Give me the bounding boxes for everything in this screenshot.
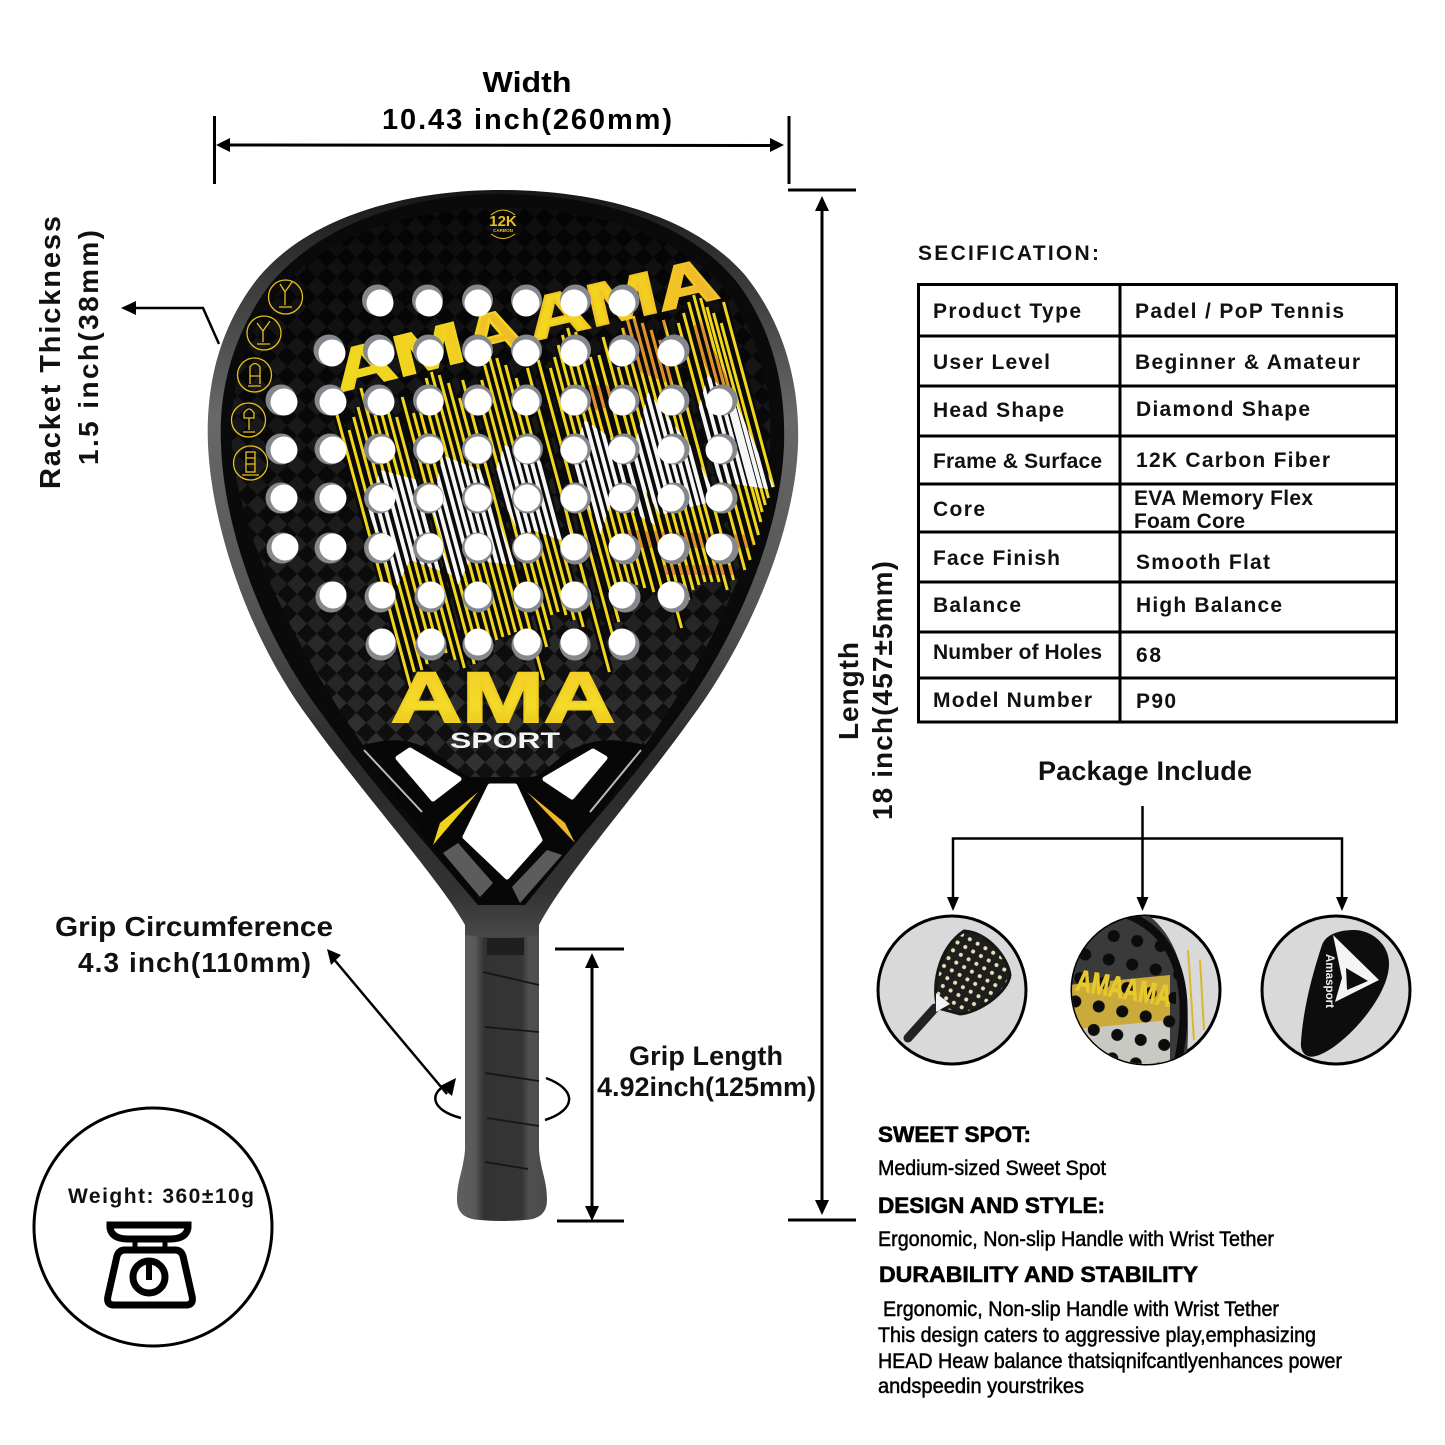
row: core: EVA Memory Flex [1134, 487, 1313, 510]
package item: racket [878, 916, 1026, 1064]
grip length label: Grip Length [629, 1041, 783, 1071]
length dimension [788, 190, 898, 1220]
length label: Length [833, 642, 864, 740]
grip circumference callout [55, 911, 569, 1120]
12K carbon badge [489, 210, 517, 238]
width arrow [214, 116, 789, 184]
row: face finish: Face Finish [933, 547, 1060, 570]
thickness arrow [121, 301, 219, 344]
design heading: DESIGN AND STYLE: [878, 1193, 1105, 1218]
bag body [1301, 930, 1389, 1057]
row: product type [933, 300, 1344, 323]
row: number of holes [933, 641, 1161, 667]
row: product type: Product Type [933, 300, 1081, 323]
row: product type: Padel / PoP Tennis [1135, 300, 1344, 323]
grip length value: 4.92inch(125mm) [597, 1072, 816, 1102]
grip length arrow [555, 949, 624, 1221]
SPORT logo: SPORT [450, 728, 561, 753]
package item: closeup [1070, 914, 1222, 1066]
specification table [918, 284, 1397, 722]
row: frame and surface: 12K Carbon Fiber [1136, 449, 1330, 472]
width value: 10.43 inch(260mm) [382, 104, 672, 136]
durability text: Ergonomic, Non-slip Handle with Wrist Tether [883, 1298, 1279, 1321]
row: balance: Balance [933, 594, 1021, 617]
12K carbon badge: 12K [489, 213, 517, 230]
sweet spot heading: SWEET SPOT: [878, 1122, 1031, 1147]
row: balance: High Balance [1136, 594, 1282, 617]
row: head shape: Head Shape [933, 399, 1064, 422]
durability text [878, 1298, 1342, 1398]
thickness value: 1.5 inch(38mm) [73, 230, 104, 465]
row: model number: P90 [1136, 690, 1176, 713]
grip handle [457, 935, 547, 1221]
row: number of holes: 68 [1136, 644, 1161, 667]
width label: Width [482, 67, 572, 99]
length arrow [788, 190, 856, 1220]
throat [362, 740, 645, 905]
face shading [232, 208, 770, 777]
racket frame [208, 190, 798, 945]
row: balance [933, 594, 1282, 617]
grip circumference value: 4.3 inch(110mm) [78, 947, 311, 978]
durability text: HEAD Heaw balance thatsiqnifcantlyenhances power [878, 1350, 1342, 1373]
12K carbon badge: CARBON [493, 228, 513, 233]
design text: Ergonomic, Non-slip Handle with Wrist Tether [878, 1228, 1274, 1251]
stripe graphic [337, 295, 774, 690]
weight label: Weight: 360±10g [68, 1185, 254, 1208]
row: core [933, 487, 1313, 533]
carbon face [232, 208, 770, 777]
upper-right top logo: AMA [520, 245, 724, 354]
bottom AMA logo: AMA [391, 659, 615, 738]
white stripes [368, 375, 774, 586]
sweet spot text: Medium-sized Sweet Spot [878, 1157, 1106, 1180]
row: user level: User Level [933, 351, 1050, 374]
row: user level [933, 351, 1360, 374]
weight badge [34, 1108, 272, 1346]
racket [208, 190, 798, 1221]
thickness label: Racket Thickness [35, 216, 67, 489]
row: core: Core [933, 498, 985, 521]
table grid [918, 284, 1397, 722]
row: frame and surface [933, 449, 1330, 473]
bag brand: Amasport [1323, 954, 1337, 1008]
row: core: Foam Core [1134, 510, 1245, 533]
width dimension [214, 67, 789, 184]
length value: 18 inch(457±5mm) [867, 561, 898, 820]
hole walls [266, 284, 738, 660]
row: frame and surface: Frame & Surface [933, 450, 1102, 473]
closeup logo: AMAAMA [1074, 964, 1174, 1014]
durability heading: DURABILITY AND STABILITY [879, 1262, 1198, 1287]
row: model number [933, 689, 1176, 713]
package heading: Package Include [1038, 756, 1252, 786]
racket thickness callout [35, 216, 219, 489]
durability text: andspeedin yourstrikes [878, 1375, 1084, 1398]
closeup racket body [1072, 916, 1188, 1064]
row: face finish [933, 547, 1270, 574]
mini racket head [936, 931, 1010, 1014]
inner black frame [221, 194, 784, 905]
feature notes [878, 1122, 1342, 1398]
package arrows [947, 806, 1348, 911]
grip length dimension [555, 949, 816, 1221]
lower-left top logo: AMA [326, 295, 530, 405]
row: head shape: Diamond Shape [1136, 398, 1310, 421]
grip circumference arrow [327, 949, 569, 1120]
holes [270, 290, 732, 656]
row: head shape [933, 398, 1310, 422]
row: face finish: Smooth Flat [1136, 551, 1270, 574]
grip technology icons [232, 280, 302, 480]
grip circumference label: Grip Circumference [55, 911, 333, 942]
row: user level: Beginner & Amateur [1135, 351, 1360, 374]
row: model number: Model Number [933, 689, 1092, 712]
row: number of holes: Number of Holes [933, 641, 1102, 664]
icon: scale [108, 1225, 192, 1305]
specification heading: SECIFICATION: [918, 242, 1099, 265]
durability text: This design caters to aggressive play,emphasizing [878, 1324, 1316, 1347]
package item: cover bag [1262, 916, 1410, 1064]
bag logo [1333, 935, 1379, 1002]
closeup gold field [1068, 975, 1170, 1070]
mini racket handle [908, 1008, 935, 1038]
orange stripes [588, 318, 754, 575]
